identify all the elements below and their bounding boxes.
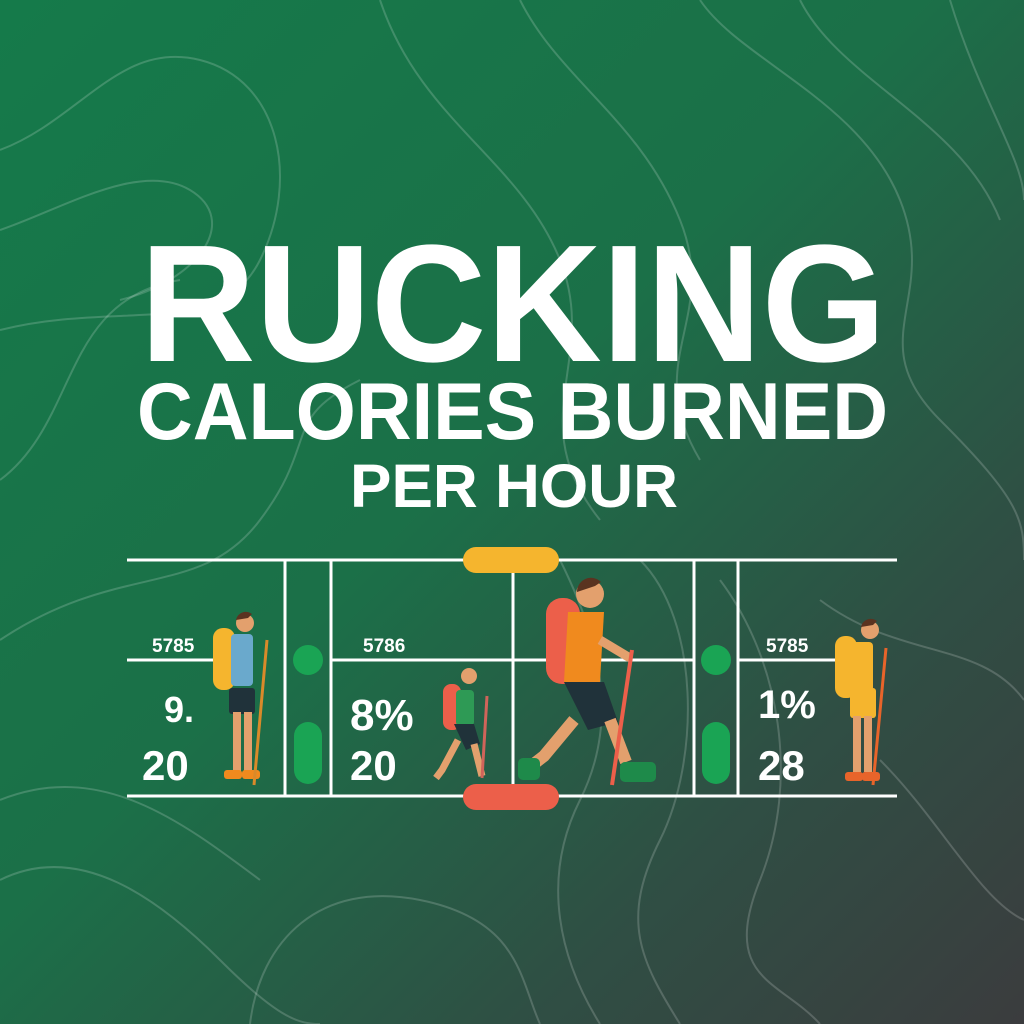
cell 1 text: 9. bbox=[164, 689, 194, 730]
cell 3 text: 5785 bbox=[766, 636, 809, 657]
cell 2 text: 20 bbox=[350, 742, 397, 789]
indicators right bbox=[701, 645, 731, 784]
subtitle: CALORIES BURNED bbox=[137, 367, 888, 457]
cell 2 text bbox=[350, 636, 414, 789]
cell 1 text: 20 bbox=[142, 742, 189, 789]
chart table bbox=[127, 547, 897, 810]
title: RUCKING bbox=[140, 211, 886, 397]
cell 1 text bbox=[142, 636, 195, 789]
subtitle line 2: PER HOUR bbox=[350, 452, 678, 520]
icon: hiker 1 standing bbox=[213, 612, 267, 785]
cell 2 text: 5786 bbox=[363, 636, 405, 657]
pill: yellow bbox=[463, 547, 559, 573]
cell 3 text: 1% bbox=[758, 683, 816, 727]
cell 3 text bbox=[758, 636, 816, 789]
cell 1 text: 5785 bbox=[152, 636, 195, 657]
icon: hiker 4 standing bbox=[835, 619, 886, 785]
cell 3 text: 28 bbox=[758, 742, 805, 789]
icon: hiker 2 walking bbox=[436, 668, 487, 778]
pill: red bbox=[463, 784, 559, 810]
cell 2 text: 8% bbox=[350, 691, 414, 740]
indicators left bbox=[293, 645, 323, 784]
icon: hiker 3 large walking bbox=[518, 578, 656, 785]
